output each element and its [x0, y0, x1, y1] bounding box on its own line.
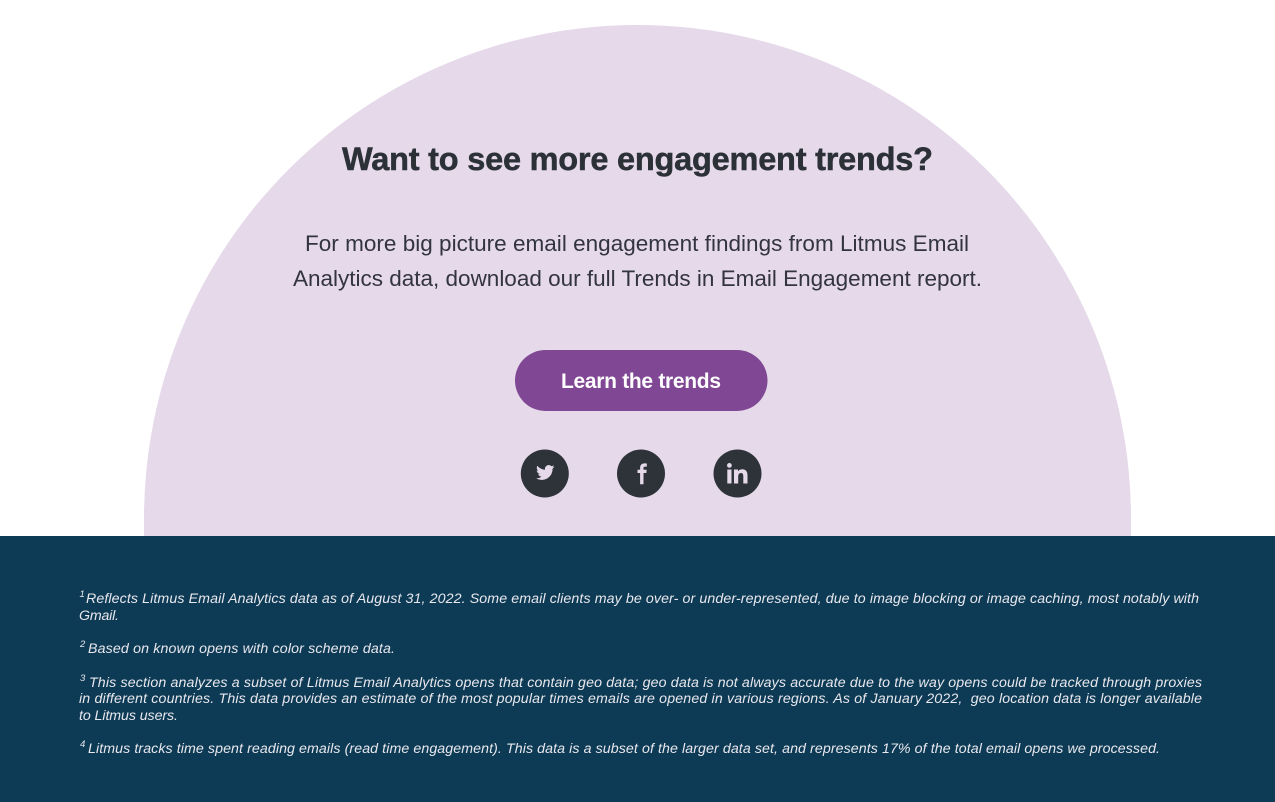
text block: description: [293, 231, 982, 291]
icon: facebook: [617, 450, 665, 498]
footnote 1: Gmail.: [79, 608, 119, 624]
icon: twitter: [521, 450, 569, 498]
text block: description: For more big picture email engagement findings from Litmus Email: [305, 231, 969, 256]
heading: Want to see more engagement trends?: [342, 141, 933, 177]
footnote 3: in different countries. This data provides an estimate of the most popular times emails are opened in various regions. As of January 2022, geo location data is longer available: [79, 691, 1202, 707]
icon: linkedin: [714, 450, 762, 498]
footnote 1: [79, 589, 1199, 624]
panel: lilac semicircle: [144, 25, 1131, 536]
text block: description: Analytics data, download our full Trends in Email Engagement report.: [293, 266, 982, 291]
footnote 1: Reflects Litmus Email Analytics data as of August 31, 2022. Some email clients may be over- or under-represented, due to image blocking or image caching, most notably with: [86, 591, 1199, 607]
footnote 1: 1: [80, 589, 85, 600]
footnote 2: 2: [79, 639, 86, 650]
footnote 3: to Litmus users.: [79, 708, 178, 724]
footnote 4: 4: [80, 739, 85, 750]
button: learn the trends: [515, 350, 768, 411]
panel: footnotes: [0, 536, 1275, 802]
footnote 3: 3: [80, 673, 86, 684]
footnote 3: This section analyzes a subset of Litmus Email Analytics opens that contain geo data; geo data is not always accurate due to the way opens could be tracked through proxies: [89, 675, 1202, 691]
button: learn the trends: Learn the trends: [561, 370, 721, 393]
footnote 4: Litmus tracks time spent reading emails (read time engagement). This data is a subset of the larger data set, and represents 17% of the total email opens we processed.: [88, 741, 1160, 757]
footnote 3: [79, 673, 1202, 724]
footnote 2: Based on known opens with color scheme data.: [88, 641, 395, 657]
